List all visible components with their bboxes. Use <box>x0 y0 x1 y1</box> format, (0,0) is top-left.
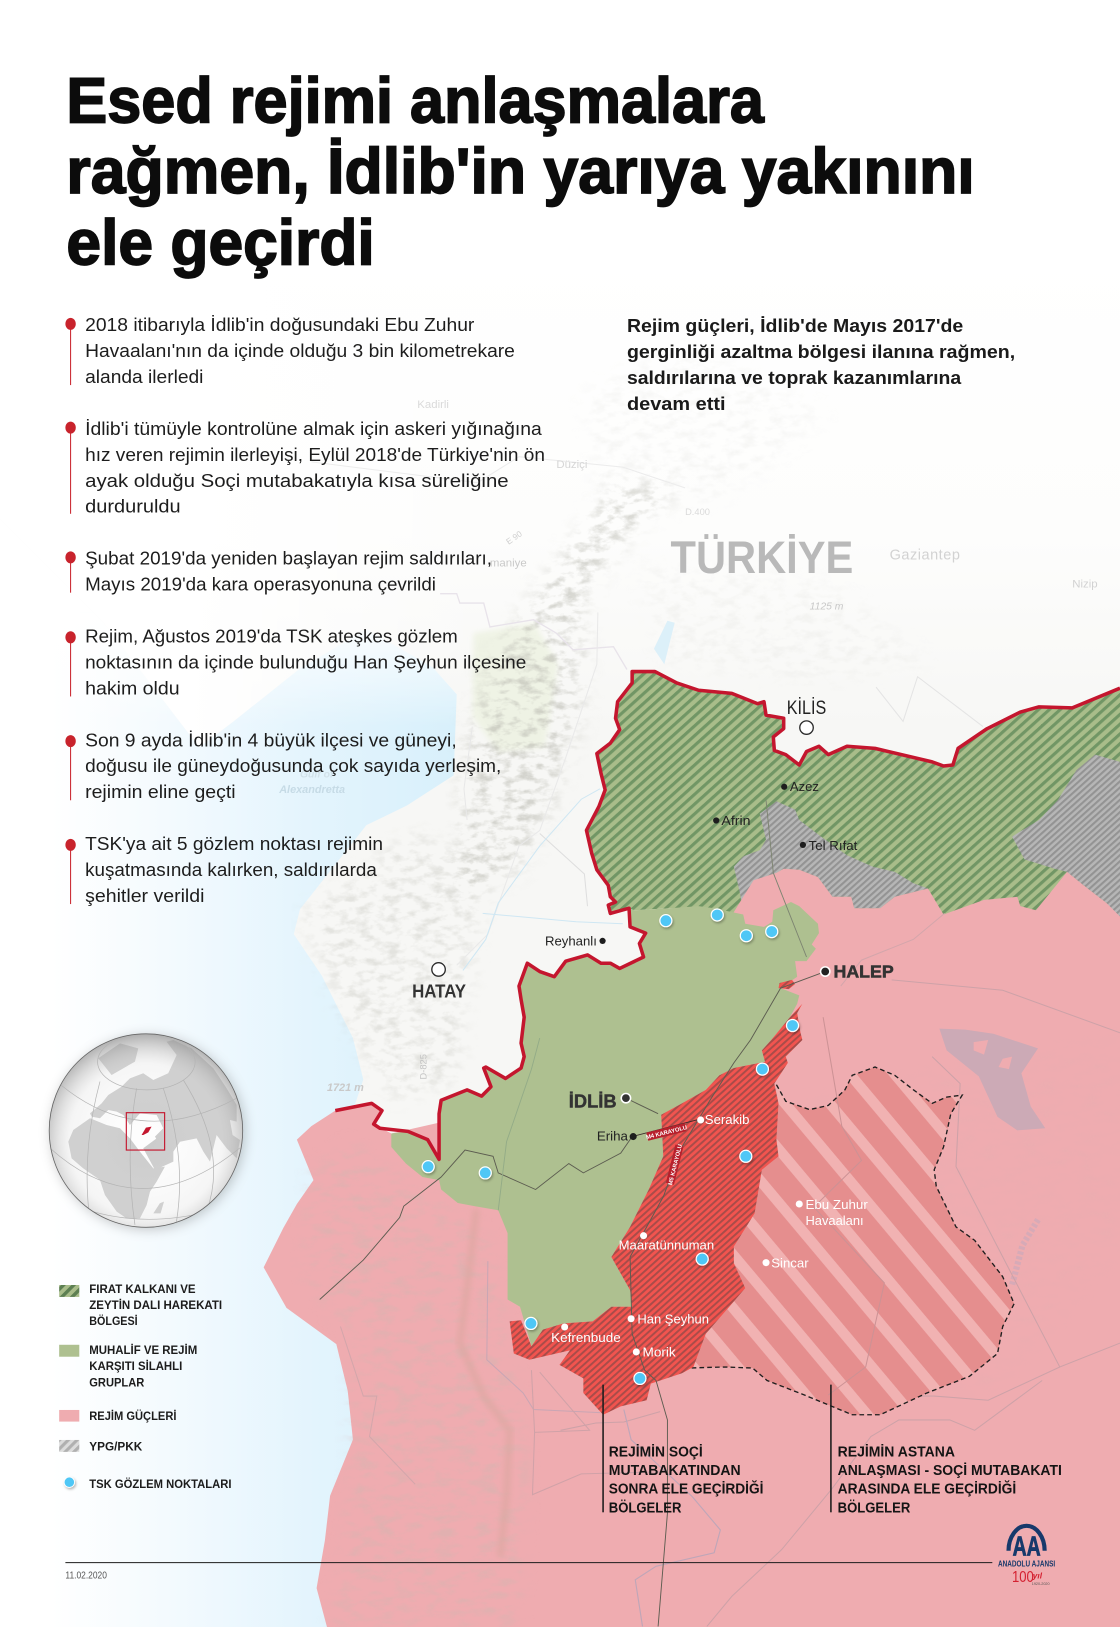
legend item: TSK: TSK GÖZLEM NOKTALARI <box>89 1476 231 1491</box>
faint base map labels: D-825 <box>419 1054 429 1079</box>
map: city markers and names: İDLİB <box>569 1091 617 1112</box>
bullet 2: ayak olduğu Soçi mutabakatıyla kısa süreliğine <box>85 470 509 491</box>
faint base map labels: 1125 m <box>810 601 844 612</box>
legend item: YPG/PKK: YPG/PKK <box>89 1440 143 1454</box>
map: Fırat Kalkanı and Zeytin Dalı zone <box>586 672 1120 934</box>
footer rule and date: 11.02.2020 <box>65 1571 107 1582</box>
legend item: Fırat Kalkanı: BÖLGESİ <box>89 1313 138 1328</box>
bullet 1: Havaalanı'nın da içinde olduğu 3 bin kilometrekare <box>85 340 515 361</box>
map: city markers and names: Maaratünnuman <box>619 1238 714 1253</box>
title: ele geçirdi <box>66 207 375 279</box>
bullet 1: 2018 itibarıyla İdlib'in doğusundaki Ebu Zuhur <box>85 314 474 335</box>
logo: Anadolu Ajansı: yıl <box>1032 1571 1043 1581</box>
faint base map labels: maniye <box>490 558 527 570</box>
bullet 2: durduruldu <box>85 496 181 517</box>
bullet 1 <box>65 314 515 387</box>
logo: Anadolu Ajansı: ANADOLU AJANSI <box>998 1558 1055 1568</box>
bullet 6: TSK'ya ait 5 gözlem noktası rejimin <box>85 833 383 854</box>
legend item: Muhalif: KARŞITI SİLAHLI <box>89 1358 182 1373</box>
faint base map labels: Nizip <box>1072 578 1098 590</box>
legend item: Fırat Kalkanı: FIRAT KALKANI VE <box>89 1282 196 1296</box>
callout: areas taken after Soçi: BÖLGELER <box>609 1499 682 1516</box>
map: city markers and names: Afrin <box>721 813 750 828</box>
legend item: YPG/PKK <box>59 1440 143 1454</box>
map: YPG/PKK zones <box>734 755 1120 927</box>
map: road labels M4 and M5: M5 KARAYOLU <box>668 1144 684 1186</box>
bullet 6: kuşatmasında kalırken, saldırılarda <box>85 859 378 880</box>
map: TSK observation points <box>422 909 799 1384</box>
map: opposition-held İdlib area <box>391 902 819 1346</box>
map: city markers and names: Sincar <box>771 1255 809 1270</box>
map: city markers and names: Ebu Zuhur <box>805 1197 868 1212</box>
bullet 5: Son 9 ayda İdlib'in 4 büyük ilçesi ve güneyi, <box>85 729 457 750</box>
label: Türkiye: TÜRKİYE <box>671 532 853 583</box>
title: rağmen, İdlib'in yarıya yakınını <box>66 135 975 207</box>
bullet 4: Rejim, Ağustos 2019'da TSK ateşkes gözlem <box>85 625 458 646</box>
map: road labels M4 and M5: M4 KARAYOLU <box>646 1125 688 1141</box>
map: city markers and names: Kefrenbude <box>551 1330 621 1345</box>
legend item: Rejim <box>59 1408 176 1423</box>
map: city markers and names: Morik <box>643 1345 676 1360</box>
bullet 6 <box>65 833 383 906</box>
map: city markers and names: HATAY <box>412 980 467 1001</box>
faint base map labels: E 90 <box>504 528 524 547</box>
summary text block: devam etti <box>627 393 726 414</box>
callout: areas taken after Soçi: SONRA ELE GEÇİRDİĞİ <box>609 1480 763 1498</box>
map: road labels M4 and M5 <box>645 1123 688 1186</box>
callout: areas taken after Soçi: REJİMİN SOÇİ <box>609 1443 703 1460</box>
bullet 3: Mayıs 2019'da kara operasyonuna çevrildi <box>85 574 436 595</box>
bullet 4: noktasının da içinde bulunduğu Han Şeyhun ilçesine <box>85 651 526 672</box>
faint base map labels: 1721 m <box>327 1082 364 1094</box>
summary text block: saldırılarına ve toprak kazanımlarına <box>627 367 962 388</box>
map: city markers and names: Tel Rıfat <box>809 838 858 853</box>
map: area captured after Soçi <box>510 980 802 1415</box>
map: city markers and names: Serakib <box>705 1112 749 1127</box>
callout: areas taken between Astana and Soçi: ANLAŞMASI - SOÇİ MUTABAKATI <box>838 1462 1062 1479</box>
bullet 4 <box>65 625 526 698</box>
map: city markers and names: Reyhanlı <box>545 934 597 949</box>
faint base map labels: Kadirli <box>417 399 449 411</box>
bullet 5: doğusu ile güneydoğusunda çok sayıda yerleşim, <box>85 755 501 776</box>
bullet 1: alanda ilerledi <box>85 366 203 387</box>
title <box>66 64 975 279</box>
logo: Anadolu Ajansı: AA <box>1013 1530 1041 1561</box>
faint base map labels: D.400 <box>685 507 710 517</box>
map: city markers and names <box>412 698 894 1360</box>
bullet 4: hakim oldu <box>85 677 180 698</box>
bullet 2: hız veren rejimin ilerleyişi, Eylül 2018'de Türkiye'nin ön <box>85 444 545 465</box>
legend item: Muhalif: MUHALİF VE REJİM <box>89 1342 197 1357</box>
logo: Anadolu Ajansı: 100 <box>1012 1569 1034 1586</box>
bullet 2 <box>65 418 545 517</box>
locator globe <box>49 1034 243 1227</box>
callout: areas taken after Soçi: MUTABAKATINDAN <box>609 1463 741 1479</box>
title: Esed rejimi anlaşmalara <box>66 64 765 136</box>
map: city markers and names: HALEP <box>834 962 894 982</box>
logo: Anadolu Ajansı <box>998 1526 1055 1586</box>
map: regime-held area <box>264 869 1120 1627</box>
bullet 6: şehitler verildi <box>85 885 204 906</box>
faint base map labels: Alexandretta <box>278 784 345 796</box>
summary text block <box>627 315 1015 414</box>
map: roads <box>320 800 825 1626</box>
map: city markers and names: Han Şeyhun <box>637 1311 709 1326</box>
faint base map labels: Gaziantep <box>890 547 960 563</box>
legend item: Muhalif <box>59 1342 197 1389</box>
legend item: Fırat Kalkanı <box>59 1282 222 1328</box>
bullet 3: Şubat 2019'da yeniden başlayan rejim saldırıları, <box>85 548 492 569</box>
bullet 3 <box>65 548 492 595</box>
bullet 2: İdlib'i tümüyle kontrolüne almak için askeri yığınağına <box>85 418 543 439</box>
callout: areas taken between Astana and Soçi <box>831 1385 1062 1516</box>
map: city markers and names: Azez <box>790 779 819 794</box>
callout: areas taken between Astana and Soçi: REJİMİN ASTANA <box>838 1443 955 1460</box>
legend item: Fırat Kalkanı: ZEYTİN DALI HAREKATI <box>89 1297 222 1312</box>
callout: areas taken between Astana and Soçi: ARASINDA ELE GEÇİRDİĞİ <box>838 1480 1016 1498</box>
callout: areas taken after Soçi <box>603 1385 763 1516</box>
legend item: Muhalif: GRUPLAR <box>89 1375 145 1389</box>
map: city markers and names: Havaalanı <box>805 1213 864 1228</box>
summary text block: gerginliği azaltma bölgesi ilanına rağmen, <box>627 341 1015 362</box>
bullet 5: rejimin eline geçti <box>85 781 236 802</box>
summary text block: Rejim güçleri, İdlib'de Mayıs 2017'de <box>627 315 963 336</box>
faint base map labels: Gulf of <box>300 769 335 780</box>
faint base map labels <box>278 399 1098 1094</box>
callout: areas taken between Astana and Soçi: BÖLGELER <box>838 1499 911 1516</box>
map: Turkish border <box>335 672 1120 1159</box>
map: city markers and names: KİLİS <box>787 698 826 719</box>
faint base map labels: Düziçi <box>556 459 587 471</box>
map: area captured between Astana and Soçi <box>687 1017 1014 1415</box>
bullet 5 <box>65 729 501 802</box>
bullet list <box>65 314 545 906</box>
logo: Anadolu Ajansı: 1920-2020 <box>1032 1582 1050 1586</box>
legend <box>59 1282 231 1491</box>
legend item: Rejim: REJİM GÜÇLERİ <box>89 1408 176 1423</box>
map: city markers and names: Eriha <box>597 1129 629 1144</box>
